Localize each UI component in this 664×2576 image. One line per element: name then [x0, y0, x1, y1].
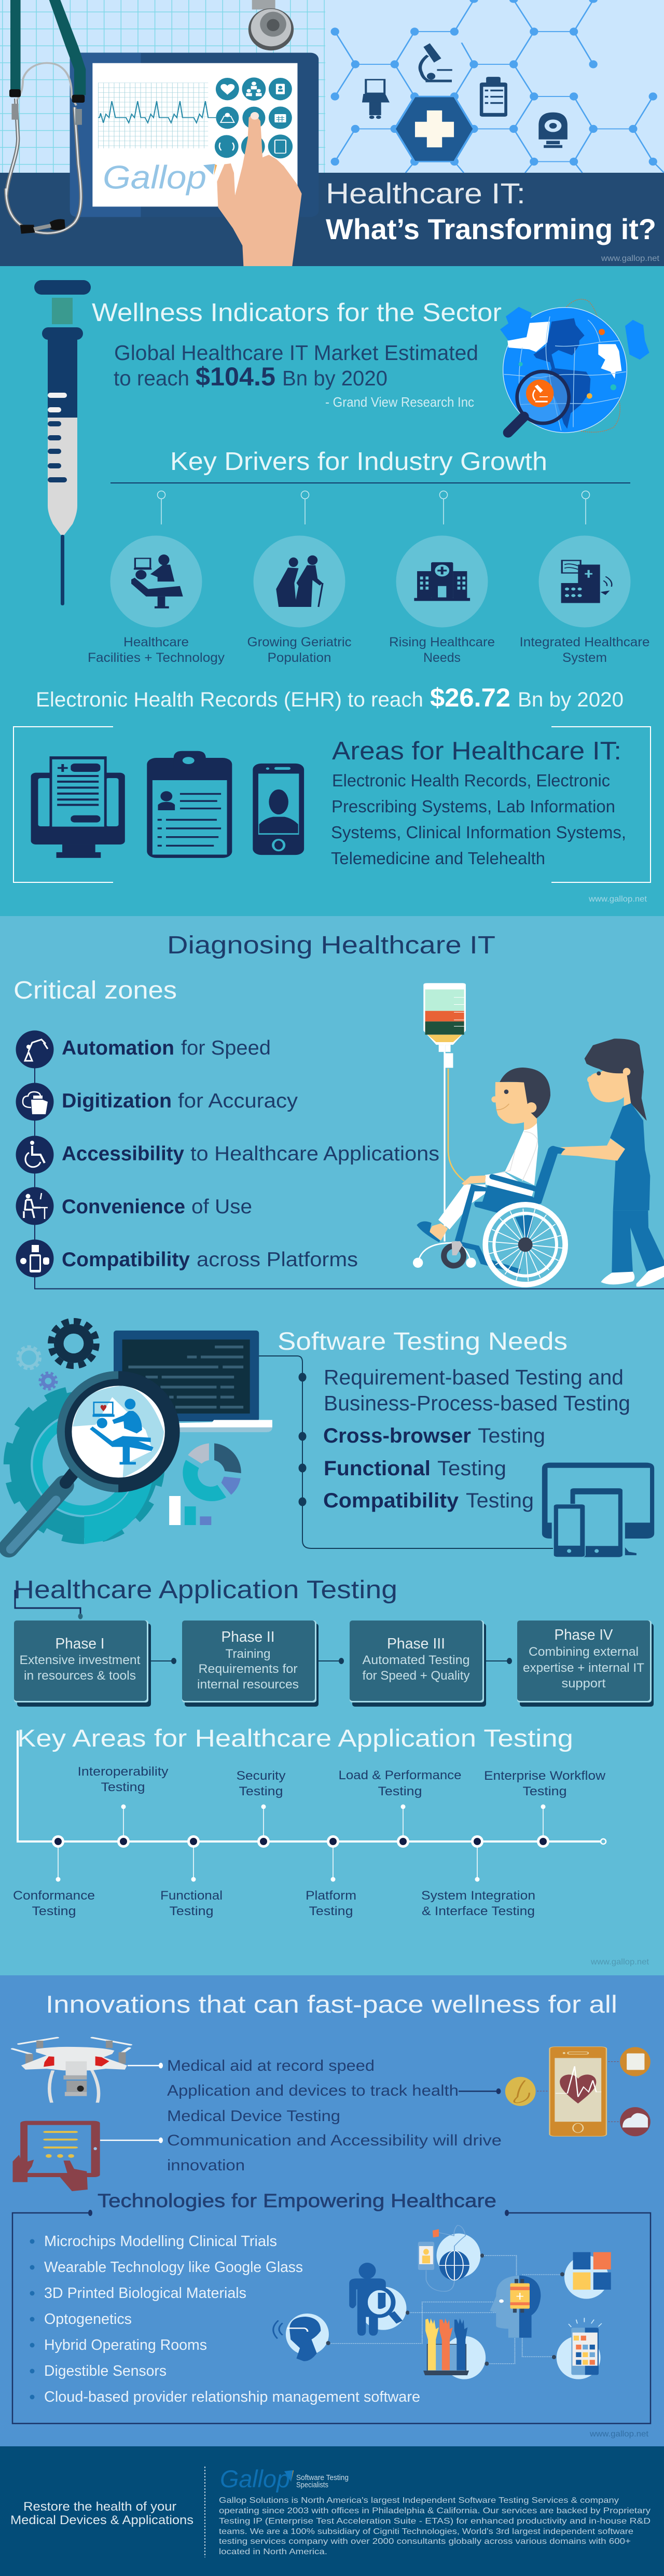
labels: testing areas: Testing	[378, 1784, 422, 1798]
text: market estimate: Global Healthcare IT Market Estimated	[114, 341, 478, 365]
zone: digitization: Digitization	[62, 1090, 172, 1112]
panel: header	[0, 0, 664, 266]
nurse	[560, 1038, 664, 1286]
list: testing needs: Functional	[324, 1457, 431, 1480]
icons: records monitor, clipboard, phone	[31, 751, 304, 858]
phase IV: Combining external	[529, 1645, 639, 1659]
about text: located in North America.	[219, 2547, 327, 2556]
panel: innovations	[0, 1975, 664, 2446]
list: testing needs: Requirement-based Testing and	[324, 1365, 624, 1389]
wheelchair	[455, 1146, 565, 1273]
url: www.gallop.net	[589, 2430, 649, 2439]
heading: software testing needs: Software Testing Needs	[278, 1328, 568, 1355]
list: testing needs: Compatibility	[323, 1489, 459, 1512]
timeline line	[35, 1058, 664, 1289]
zone: accessibility	[16, 1136, 439, 1173]
call to action	[10, 2500, 193, 2527]
icon: MRI scanner	[538, 113, 568, 148]
laptop with code	[114, 1331, 272, 1432]
zone: convenience: Convenience	[62, 1196, 185, 1218]
heading: healthcare application testing: Healthcare Application Testing	[13, 1576, 397, 1604]
zone: compatibility: Compatibility	[62, 1249, 190, 1271]
driver: growing geriatric population	[247, 535, 352, 665]
gallop logo: Gallop	[220, 2465, 290, 2492]
url: www.gallop.net	[588, 895, 647, 904]
zone: accessibility: to Healthcare Applications	[190, 1143, 439, 1165]
labels: testing areas: Testing	[309, 1904, 353, 1918]
zone: automation: Automation	[62, 1037, 174, 1059]
patient	[417, 1068, 550, 1242]
about text: Gallop Solutions is North America's largest Independent Software Testing Services & company	[219, 2496, 619, 2505]
phase II: Training	[225, 1647, 271, 1661]
phase IV: expertise + internal IT	[523, 1661, 644, 1675]
phase II: Phase II	[221, 1629, 275, 1645]
icon: monitor	[31, 756, 125, 858]
list: testing needs: Cross-browser	[323, 1424, 471, 1447]
phase I	[14, 1621, 151, 1707]
tablet logo: Gallop	[103, 159, 206, 196]
phase II: Requirements for	[198, 1662, 298, 1676]
heading: diagnosing: Diagnosing Healthcare IT	[167, 932, 495, 959]
labels: testing areas: & Interface Testing	[422, 1904, 535, 1918]
phase IV: support	[561, 1677, 606, 1691]
list: technologies: Wearable Technology like Google Glass	[44, 2259, 303, 2276]
illustration: technology network	[273, 2225, 611, 2379]
text: areas for healthcare IT: Telemedicine and Telehealth	[331, 849, 545, 868]
list: technologies: Hybrid Operating Rooms	[44, 2337, 207, 2353]
icon: puzzle	[560, 2252, 611, 2299]
heading: key areas: Key Areas for Healthcare Application Testing	[17, 1724, 573, 1752]
list: testing needs: Testing	[466, 1489, 534, 1512]
icon: telehealth phone	[253, 764, 304, 855]
icon: glasses head	[273, 2314, 330, 2361]
phase II: internal resources	[197, 1678, 299, 1692]
phase I: Phase I	[55, 1636, 105, 1652]
ECG chart	[98, 82, 216, 148]
zone: accessibility: Accessibility	[62, 1143, 184, 1165]
driver: integrated healthcare system: Integrated Healthcare	[520, 635, 649, 649]
url: www.gallop.net	[590, 1958, 649, 1966]
list: technologies: Optogenetics	[44, 2311, 132, 2328]
call to action: Restore the health of your	[23, 2500, 176, 2514]
icon: app phone	[552, 2318, 602, 2379]
text: areas for healthcare IT: Prescribing Systems, Lab Information	[331, 797, 615, 816]
hand	[217, 113, 302, 266]
driver: growing geriatric population: Growing Geriatric	[247, 635, 352, 649]
illustration: tablet with stethoscope and hand	[6, 0, 319, 266]
text: areas for healthcare IT	[331, 737, 626, 868]
illustration: software testing	[9, 1321, 272, 1549]
list: testing needs: Testing	[478, 1424, 545, 1447]
icon: medical cross hexagon	[395, 96, 474, 162]
about text: testing services company with over 2000 consultants globally across various domains with 600+	[219, 2537, 631, 2546]
list: innovations: Medical Device Testing	[167, 2108, 340, 2125]
zone: digitization: for Accuracy	[178, 1090, 298, 1112]
driver: growing geriatric population: Population	[268, 650, 331, 665]
text: market estimate: Bn by 2020	[282, 366, 388, 390]
list: innovations: Medical aid at record speed	[167, 2057, 375, 2074]
call to action: Medical Devices & Applications	[10, 2513, 193, 2527]
gallop logo: Software Testing	[296, 2473, 349, 2482]
phase IV	[517, 1621, 654, 1707]
list: innovations: Communication and Accessibility will drive	[167, 2132, 502, 2149]
driver: healthcare facilities + technology	[88, 535, 225, 665]
zone: convenience: of Use	[191, 1196, 252, 1218]
phase I: Extensive investment	[20, 1653, 141, 1667]
text: EHR forecast: Electronic Health Records (EHR) to reach	[36, 688, 423, 711]
icon: microscope	[420, 43, 452, 82]
title: Healthcare IT:	[326, 177, 525, 210]
about text: teams. We are a 100% subsidiary of Cigniti Technologies, World's 3rd largest independent software	[219, 2527, 633, 2536]
frame: areas for healthcare IT	[13, 727, 651, 882]
app icons	[215, 77, 293, 158]
icon: clipboard	[147, 751, 232, 858]
icon: figure with magnifier	[349, 2263, 409, 2336]
list: innovations: Application and devices to track health	[167, 2082, 459, 2099]
phase connectors	[151, 1658, 511, 1664]
list: testing needs	[323, 1365, 630, 1512]
driver: rising healthcare needs	[389, 535, 495, 665]
list: technologies: Microchips Modelling Clinical Trials	[44, 2233, 277, 2250]
labels: testing areas	[13, 1765, 606, 1918]
labels: testing areas: Testing	[32, 1904, 76, 1918]
charts	[169, 1443, 241, 1525]
zone: digitization	[16, 1083, 298, 1120]
heading: technologies: Technologies for Empowering Healthcare	[98, 2190, 496, 2211]
heading: key drivers: Key Drivers for Industry Growth	[170, 448, 547, 476]
driver pins	[158, 491, 589, 524]
about text: operating since 2003 with offices in Philadelphia & California. Our services are backed by Proprietary	[219, 2506, 651, 2515]
icon: dental chair	[90, 1398, 154, 1464]
driver: integrated healthcare system: System	[562, 650, 607, 665]
text: market estimate	[114, 341, 478, 391]
list: innovations	[167, 2057, 502, 2174]
phase III: Automated Testing	[362, 1653, 470, 1667]
zone: automation: for Speed	[181, 1037, 271, 1059]
text: market estimate: $104.5	[196, 362, 275, 391]
syringe	[34, 280, 91, 605]
labels: testing areas: Enterprise Workflow	[484, 1769, 606, 1783]
small gears	[18, 1321, 96, 1389]
illustration: patient in wheelchair with nurse	[413, 1038, 664, 1286]
labels: testing areas: Testing	[523, 1784, 566, 1798]
text: areas for healthcare IT: Electronic Health Records, Electronic	[332, 771, 610, 790]
panel: diagnosing healthcare IT	[0, 916, 664, 1975]
magnifier	[9, 1375, 172, 1549]
connector line with bullets	[259, 1356, 555, 1548]
chest piece	[248, 0, 294, 50]
stethoscope	[6, 0, 86, 234]
dotted connectors	[329, 2255, 560, 2364]
labels: testing areas: Testing	[169, 1904, 214, 1918]
panel: footer	[0, 2446, 664, 2576]
large gear	[10, 1392, 158, 1544]
timeline: key areas	[18, 1730, 606, 1882]
IV pole and tube	[444, 1044, 464, 1241]
list: technologies: 3D Printed Biological Materials	[44, 2285, 246, 2302]
labels: testing areas: Testing	[239, 1784, 283, 1798]
text: EHR forecast: $26.72	[430, 683, 510, 712]
labels: testing areas: Interoperability	[78, 1765, 168, 1779]
heading: innovations: Innovations that can fast-pace wellness for all	[46, 1990, 617, 2018]
icon: tablet with hands	[12, 2121, 100, 2191]
icon: puzzle globe with magnifier	[500, 299, 649, 433]
tablet body	[70, 53, 319, 217]
zone: compatibility	[16, 1240, 358, 1277]
connector: health tracker	[459, 2088, 501, 2094]
list: technologies: Cloud-based provider relationship management software	[44, 2389, 420, 2405]
text: EHR forecast	[36, 683, 624, 712]
frame: technologies	[12, 2210, 651, 2423]
labels: testing areas: System Integration	[421, 1889, 535, 1903]
list: testing needs: Testing	[437, 1457, 506, 1480]
list: testing needs: Business-Process-based Testing	[324, 1391, 630, 1415]
connector: drone	[128, 2062, 163, 2069]
url: www.gallop.net	[601, 254, 660, 263]
phase III: for Speed + Quality	[362, 1669, 470, 1683]
zone: automation	[16, 1030, 271, 1069]
connector: tablet	[100, 2137, 163, 2143]
text: areas for healthcare IT: Areas for Healthcare IT:	[332, 737, 621, 765]
title	[326, 177, 656, 245]
icon: IV bag	[423, 983, 466, 1068]
icon: devices	[542, 1463, 654, 1557]
heading: wellness indicators: Wellness Indicators for the Sector	[92, 299, 502, 327]
labels: testing areas: Security	[237, 1769, 285, 1783]
labels: testing areas: Platform	[306, 1889, 356, 1903]
about text: Testing IP (Enterprise Test Acceleration Suite - ETAS) for enhanced productivity and in-house R&D	[219, 2517, 651, 2526]
zone: convenience	[16, 1187, 252, 1225]
icon: lab scanner	[362, 80, 390, 119]
icon: clipboard	[480, 77, 507, 117]
text: EHR forecast: Bn by 2020	[518, 688, 624, 711]
text: areas for healthcare IT: Systems, Clinical Information Systems,	[331, 823, 626, 842]
hexagon network	[331, 0, 664, 173]
driver: rising healthcare needs: Rising Healthcare	[389, 635, 495, 649]
driver: healthcare facilities + technology: Facilities + Technology	[88, 650, 225, 665]
driver: integrated healthcare system	[520, 535, 649, 665]
phase I: in resources & tools	[24, 1669, 136, 1683]
labels: testing areas: Conformance	[13, 1889, 95, 1903]
text: market estimate: to reach	[114, 366, 189, 390]
icon: globe and phone	[418, 2225, 484, 2291]
list: technologies: Digestible Sensors	[44, 2363, 167, 2379]
driver: healthcare facilities + technology: Healthcare	[123, 635, 189, 649]
gallop logo: Specialists	[296, 2481, 328, 2489]
labels: testing areas: Functional	[160, 1889, 223, 1903]
panel: wellness indicators	[0, 266, 664, 916]
phase II	[182, 1621, 319, 1707]
icon: drone	[12, 2038, 130, 2103]
driver: rising healthcare needs: Needs	[423, 650, 461, 665]
title: What’s Transforming it?	[326, 213, 656, 245]
list: innovations: innovation	[167, 2157, 245, 2174]
gallop logo	[220, 2465, 349, 2492]
phase IV: Phase IV	[554, 1627, 613, 1643]
zone: compatibility: across Platforms	[197, 1249, 358, 1271]
icon: hands on laptop	[423, 2318, 489, 2379]
source note: - Grand View Research Inc	[325, 394, 474, 410]
icon: connected health phone	[505, 2047, 651, 2136]
about text	[219, 2496, 651, 2556]
labels: testing areas: Load & Performance	[338, 1768, 462, 1782]
phase III	[350, 1621, 486, 1707]
list: technologies	[30, 2233, 420, 2405]
labels: testing areas: Testing	[101, 1780, 145, 1794]
phase III: Phase III	[387, 1636, 445, 1652]
heading: critical zones: Critical zones	[13, 977, 177, 1004]
icon: brain head pill	[490, 2276, 541, 2338]
